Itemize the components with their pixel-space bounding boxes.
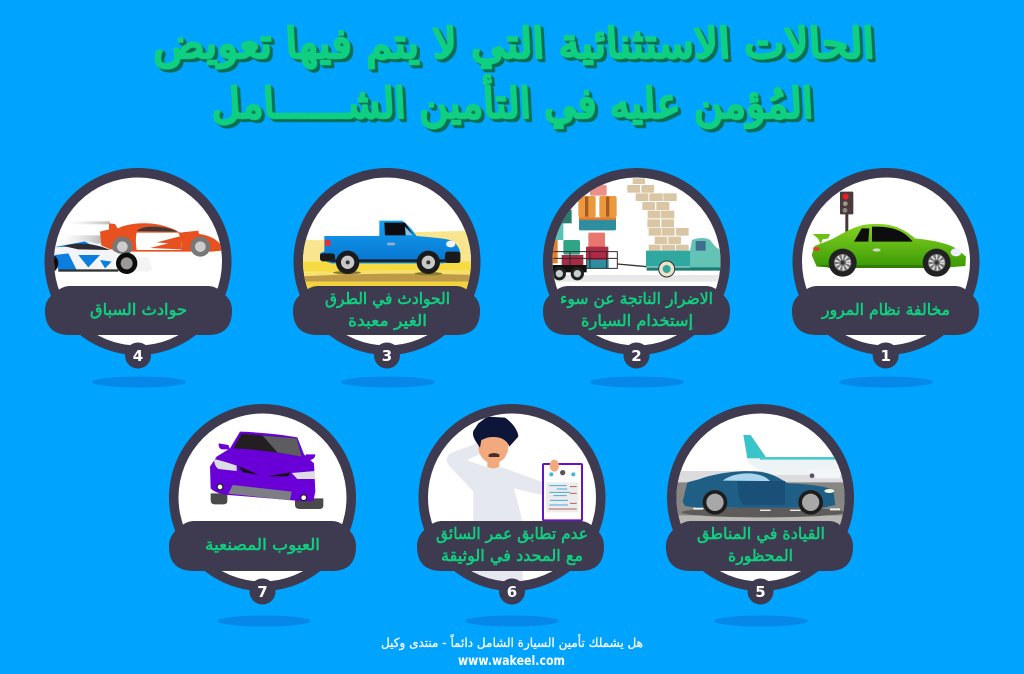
label pill — [45, 286, 232, 335]
number badge: 1 — [880, 347, 891, 365]
panel: case 7 manufacturing defects — [169, 404, 356, 626]
label text — [436, 524, 588, 566]
panel: case 2 misuse of the car — [543, 168, 730, 388]
number badge: 4 — [133, 347, 143, 365]
label text — [697, 524, 825, 566]
label text: مع المحدد في الوثيقة — [441, 546, 583, 566]
title — [151, 19, 876, 129]
label text — [325, 289, 450, 331]
number badge — [748, 578, 774, 604]
footer text — [381, 633, 643, 669]
number badge: 2 — [631, 347, 642, 365]
number badge: 3 — [382, 347, 392, 365]
label pill — [293, 286, 480, 335]
label text: الاضرار الناتجة عن سوء — [560, 289, 713, 309]
number badge — [873, 342, 899, 368]
label pill — [543, 286, 730, 335]
label pill — [417, 521, 604, 571]
label text: الحوادث في الطرق — [325, 289, 450, 309]
number badge — [250, 578, 276, 604]
label pill — [169, 521, 356, 571]
number badge — [374, 342, 400, 368]
number badge: 6 — [507, 583, 517, 601]
panel: case 4 racing accidents — [38, 168, 232, 388]
label text: مخالفة نظام المرور — [821, 300, 950, 320]
icon: blue car near airplane — [675, 435, 848, 524]
number badge: 7 — [257, 583, 268, 601]
label pill — [792, 286, 979, 335]
icon: purple car front — [210, 432, 323, 509]
label text: القيادة في المناطق — [697, 524, 825, 544]
label text: عدم تطابق عمر السائق — [436, 524, 588, 544]
icon: blue pickup on sand — [298, 221, 475, 290]
panel: case 1 traffic violation — [792, 168, 980, 388]
number badge: 5 — [755, 583, 766, 601]
label pill — [666, 521, 853, 571]
number badge — [624, 342, 650, 368]
footer text: هل يشملك تأمين السيارة الشامل دائماً - منتدى وكيل — [381, 633, 643, 651]
footer text: www.wakeel.com — [458, 654, 565, 669]
title: المُؤمن عليه في التأمين الشــــــامل — [210, 74, 814, 129]
label text: حوادث السباق — [90, 300, 187, 320]
label text — [560, 289, 713, 331]
label text: الغير معبدة — [348, 311, 427, 331]
label text: إستخدام السيارة — [581, 311, 693, 331]
icon: racing cars — [38, 221, 222, 274]
panel: case 6 driver age mismatch — [417, 404, 606, 626]
icon: overloaded truck and trailer — [552, 178, 723, 282]
title: الحالات الاستثنائية التي لا يتم فيها تعويض — [151, 19, 876, 69]
icon: green car at traffic light — [812, 192, 966, 277]
panel: case 3 unpaved roads — [293, 168, 480, 388]
number badge — [499, 578, 525, 604]
label text: المحظورة — [728, 546, 793, 566]
number badge — [125, 342, 151, 368]
label text: العيوب المصنعية — [205, 535, 320, 555]
panel: case 5 restricted areas — [666, 404, 854, 626]
icon: confused man holding document — [447, 417, 582, 582]
